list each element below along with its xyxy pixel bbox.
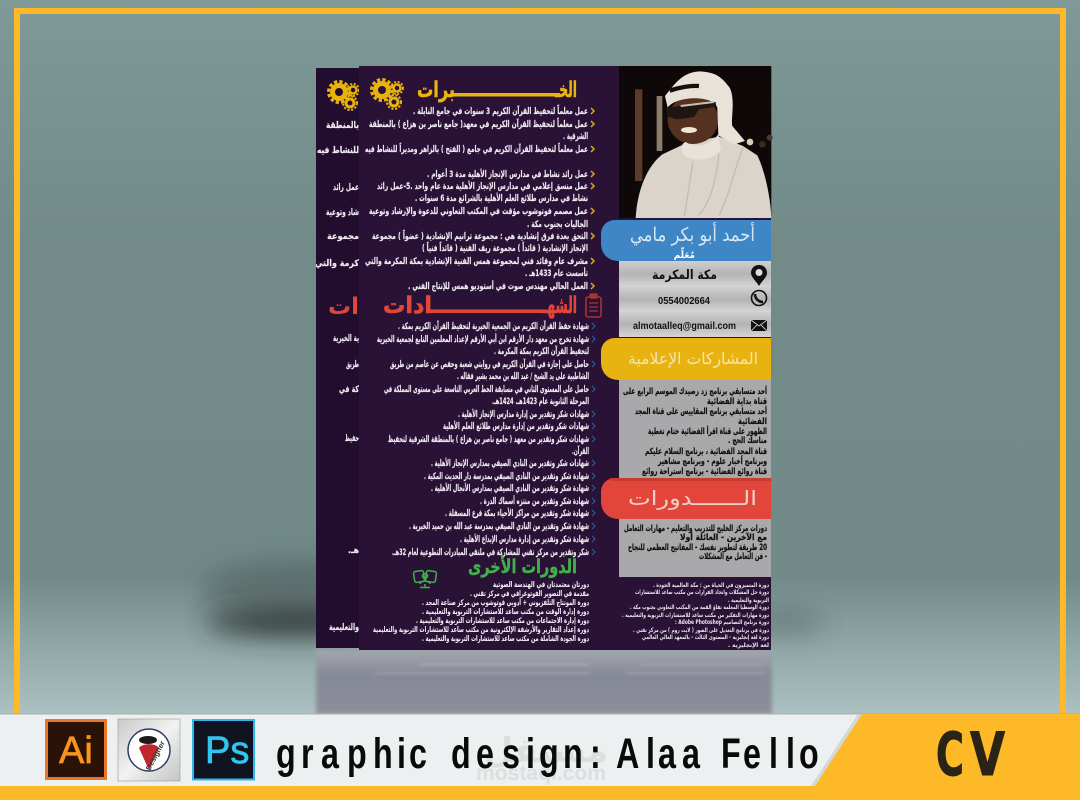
heading: courses: الـــــــدورات (628, 486, 757, 510)
certificate text: شهادات شكر وتقدير من إدارة مدارس الإنجاز الأهلية . (458, 408, 589, 420)
back sheet text: طريق (346, 360, 359, 370)
heading: media: المشاركات الإعلامية (628, 349, 758, 369)
heading: experience: برات (417, 78, 455, 103)
courses list: 20 طريقة لتطوير نفسك - المفاتيح العظمى للنجاح (628, 543, 767, 553)
experience text: الإنجاز الإنشادية ( قائداً ) مجموعة ريف الفنية ( قائداً فنياً ) (422, 241, 588, 254)
icon: designer badge (118, 719, 180, 781)
panel: small courses list: دورة لغة إنجليزية - المستوى الثالث - بالمعهد العالي العالمي (642, 634, 769, 641)
certificate text: شهادات شكر وتقدير من معهد ( جامع ناصر بن هزاع ) بالمنطقة الشرقية لتحفيظ (388, 435, 589, 445)
back sheet text: للنشاط فيه (317, 146, 359, 156)
email: almotaalleq@gmail.com (633, 320, 736, 332)
sheet shadow right (745, 610, 825, 634)
experience text: نشاط في مدارس طلائع العلم الأهلية بالشرائع مدة 6 سنوات . (415, 192, 588, 204)
certificate text: شهادة شكر وتقدير من النادي الصيفي بمدرسة دار الحديث المكية . (424, 472, 589, 482)
panel: main sheet purple base (359, 66, 771, 650)
certificate text: القرآن. (572, 445, 589, 457)
courses text: دورة إعداد التقارير والأرشفة الإلكترونية من مكتب ساعد للاستشارات التربوية والتعليمية (373, 624, 589, 634)
certificate text: الشاطبية على يد الشيخ / عبد الله بن محمد بشير فقاله . (457, 372, 589, 382)
courses list: مع الآخرين - العائلة أولا (680, 531, 767, 543)
experience text: العمل الحالي مهندس صوت في أستوديو همس للإنتاج الفني . (408, 280, 588, 292)
city: مكة المكرمة (652, 268, 717, 283)
phone: 0554002664 (658, 296, 710, 307)
icon: envelope (751, 320, 767, 331)
bottom bar (0, 714, 1080, 800)
main CV sheet (359, 66, 773, 650)
back sheet text: ية الخيرية (333, 334, 359, 344)
sheet shadow left (200, 560, 400, 636)
yellow corner (815, 714, 1080, 786)
certificate text: حاصل على إجازة في القرآن الكريم في روايتي شعبة وحفص عن عاصم من طريق (390, 358, 589, 370)
photo (619, 66, 773, 218)
banner: courses (601, 478, 771, 519)
heading: certificates: الشهـ (542, 293, 577, 319)
icon: clipboard (586, 294, 601, 317)
back sheet text: مجموعة (327, 232, 359, 242)
back CV sheet (316, 68, 359, 648)
watermark: مستقل (484, 731, 608, 771)
CV label: V (970, 720, 1005, 790)
panel: small courses list (622, 582, 769, 649)
courses list: - فن التعامل مع المشكلات (699, 552, 767, 562)
experience text: عمل مصمم فوتوشوب مؤقت في المكتب التعاوني للدعوة والإرشاد وتوعية (369, 207, 588, 217)
certificate text: شهادة حفظ القرآن الكريم من الجمعية الخيرية لتحفيظ القرآن الكريم بمكة . (398, 320, 589, 332)
experience bullets (591, 108, 594, 289)
certificate text: شهادة شكر وتقدير من إدارة مدارس الإبداع الأهلية . (460, 533, 589, 545)
courses text: دورة إدارة الاجتماعات من مكتب ساعد للاستشارات التربوية والتعليمية . (416, 616, 589, 625)
icon: monitors (413, 570, 437, 588)
media text: وبرنامج أخبار علوم - وبرنامج مشاهير (657, 455, 767, 467)
media text: أحد متسابقي برنامج المقاييس على قناة المجد (635, 405, 767, 417)
experience text: التحق بعدة فرق إنشادية هي : مجموعة ترانيم الإنشادية ( عضواً ) مجموعة (372, 229, 588, 242)
panel: small courses list: دورة حل المشكلات واتخاذ القرارات من مكتب ساعد للاستشارات (635, 589, 769, 596)
certificate text: شهادة شكر وتقدير من النادي الصيفي بمدارس الأنجال الأهلية . (431, 482, 589, 494)
certificate text: شهادات شكر وتقدير من إدارة مدارس طلائع العلم الأهلية (443, 420, 589, 432)
back sheet text: حفيظ (345, 434, 359, 444)
media text: مناسك الحج . (728, 436, 767, 446)
experience text: عمل معلماً لتحفيظ القرآن الكريم في معهد( جامع ناصر بن هزاع ) بالمنطقة (369, 117, 588, 130)
icon: gears (372, 80, 403, 109)
heading: certificates: ادات (383, 293, 432, 319)
certificate text: شكر وتقدير من مركز تقني للمشاركة في ملتقى المبادرات التطوعية لعام 32هـ. (392, 548, 589, 558)
heading: experience (417, 78, 577, 103)
media text: قناة روائع الفضائية - برنامج استراحة روائع (642, 467, 767, 477)
heading: experience: الخـ (554, 78, 577, 103)
courses text: دورة المونتاج التلفزيوني + أدوبي فوتوشوب من مركز صناعة المجد . (422, 597, 589, 607)
back sheet text: كرمة والتي (315, 259, 360, 269)
media text: قناة بداية الفضائية (707, 397, 767, 407)
experience text: الجاليات بجنوب مكة . (527, 220, 588, 230)
heading: certificates (383, 293, 577, 319)
back sheet text: شاد وتوعية (326, 208, 359, 218)
icon: Illustrator: Ai (59, 730, 93, 772)
experience text: عمل معلماً لتحفيظ القرآن الكريم في جامع ( الفتح ) بالزاهر ومديراً للنشاط فيه (365, 142, 588, 155)
panel: name banner (601, 220, 771, 261)
certificate text: شهادة شكر وتقدير من النادي الصيفي بمدرسة عبد الله بن حميد الخيرية . (409, 522, 589, 532)
panel: small courses list: لغة الإنجليزية . (728, 642, 769, 649)
certificate text: شهادة شكر وتقدير من منتزه أسماك الدرة . (480, 495, 589, 507)
panel: small courses list: دورة الوسطيا المعلمة تفاؤ القمة من المكتب التعاوني بجنوب مكة . (630, 604, 769, 611)
courses text: دورتان معتمدتان في الهندسة الصوتية (493, 580, 589, 589)
CV label: C (936, 720, 964, 790)
panel: small courses list: دورة المتميزون في الحياة من : مكة العالمية الجودة . (653, 582, 769, 589)
media text: الفضائية (738, 417, 767, 427)
experience text: الشرقية . (563, 132, 588, 142)
panel: experience (365, 78, 594, 292)
certificate text: شهادة شكر وتقدير من مراكز الأحياء بمكة فرع المسفلة . (445, 507, 589, 519)
name: أحمد أبو بكر مامي (630, 222, 755, 246)
floor reflection (316, 650, 772, 714)
icon: Photoshop (193, 720, 254, 780)
experience text: عمل منسق إعلامي في مدارس الإنجاز الأهلية مدة عام واحد .5-عمل رائد (377, 180, 588, 192)
certificate bullets (592, 323, 595, 555)
panel: other courses (373, 555, 589, 643)
courses text (373, 580, 589, 643)
banner: media (601, 338, 771, 380)
icon: designer badge: Designer (144, 739, 167, 772)
certificate text: المرحلة الثانوية عام 1423هـ. 1424هـ. (492, 397, 589, 407)
courses text: دورة إدارة الوقت من مكتب ساعد للاستشارات التربوية والتعليمية . (422, 607, 589, 616)
back sheet text (315, 121, 360, 633)
experience text: مشرف عام وقائد فني لمجموعة همس الفنية الإنشادية بمكة المكرمة والتي (365, 257, 588, 267)
courses text: مقدمة في التصوير الفوتوغرافي في مركز تقني . (470, 589, 589, 598)
panel: small courses list: دورة في برنامج التعديل على الصور ( لايت روم ) من مركز تقني . (633, 627, 769, 634)
back sheet text: ات (328, 294, 359, 320)
panel: contact details (619, 261, 771, 337)
experience text: تأسست عام 1433هـ . (525, 267, 588, 279)
job title: مُعَلِّم (674, 246, 695, 261)
heading: other courses: الدورات الأخرى (468, 555, 577, 578)
CV label (936, 720, 1005, 790)
experience text (365, 104, 588, 292)
icon: Photoshop: Ps (205, 730, 249, 772)
media text: أحد متسابقي برنامج زد رصيدك الموسم الرابع على (623, 385, 767, 397)
certificate text (377, 320, 589, 558)
panel: small courses list: دورة برنامج التصاميم Adobe Photoshop : (675, 619, 769, 626)
media text: الظهور على قناة اقرأ الفضائية ختام تغطية (648, 425, 767, 437)
certificate text: لتحفيظ القرآن الكريم بمكة المكرمة . (494, 345, 589, 357)
icon: pin (751, 265, 767, 286)
back sheet text: بالمنطقة (326, 121, 359, 131)
courses list (624, 524, 767, 562)
panel: certificates (377, 293, 601, 558)
media text (623, 385, 767, 477)
panel: courses (601, 478, 771, 577)
panel: small courses list: دورة مهارات التفكير من مكتب ساعد للاستشارات التربوية والتعليمية . (622, 612, 769, 619)
back sheet text: كة في (339, 385, 360, 395)
icon: back sheet gears (328, 82, 359, 110)
courses text: دورة الجودة الشاملة من مكتب ساعد للاستشارات التربوية والتعليمية . (422, 634, 589, 643)
icon: Illustrator (46, 720, 106, 778)
courses list: دورات مركز الخليج للتدريب والتعليم - مهارات التعامل (624, 524, 767, 534)
media text: قناة المجد الفضائية ، برنامج السلام عليكم (645, 447, 767, 457)
back sheet text: هـ. (348, 546, 359, 556)
experience text: عمل معلماً لتحفيظ القرآن الكريم 3 سنوات في جامع النابلة . (413, 104, 588, 117)
certificate text: شهادات شكر وتقدير من النادي الصيفي بمدارس الإنجاز الأهلية . (431, 457, 589, 469)
back sheet text: عمل رائد (333, 183, 359, 193)
watermark (476, 731, 608, 785)
certificate text: حاصل على المستوى الثاني في مسابقة الخط العربي التاسعة على مستوى المملكة في (384, 385, 589, 395)
experience text: عمل رائد نشاط في مدارس الإنجاز الأهلية مدة 3 أعوام . (427, 168, 588, 180)
icon: phone (752, 290, 766, 306)
panel: small courses list: التربوية والتعليمية . (728, 597, 769, 604)
credit text: graphic design: Alaa Fello (276, 731, 819, 778)
watermark: mostaql.com (476, 762, 606, 785)
panel: media participation (601, 338, 771, 479)
certificate text: شهادة تخرج من معهد دار الأرقم ابن أبي الأرقم لإعداد المعلمين التابع لجمعية الخيرية (377, 333, 589, 345)
back sheet text: والتعليمية (329, 623, 359, 633)
